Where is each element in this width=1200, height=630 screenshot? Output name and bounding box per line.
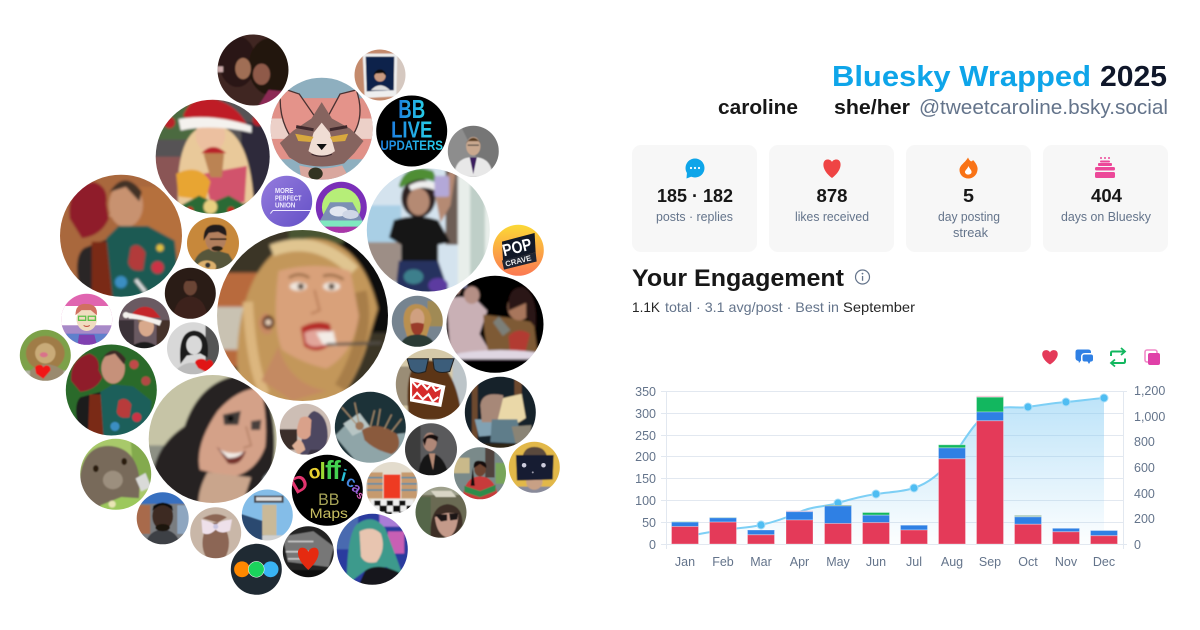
avatar: teal-haired woman bbox=[336, 514, 408, 585]
icon: chat bubble bbox=[686, 158, 704, 178]
month labels: May bbox=[826, 555, 851, 569]
avatar: smiling woman with dark hair bbox=[148, 375, 277, 503]
engagement summary bbox=[632, 299, 915, 315]
avatar: polaroid in hand bbox=[354, 50, 406, 100]
avatar: bug in bed painting bbox=[334, 392, 406, 463]
avatar: black and white street with red heart bbox=[282, 526, 334, 578]
left axis labels: 50 bbox=[642, 516, 656, 530]
cumulative area bbox=[685, 398, 1104, 544]
cumulative line bbox=[685, 398, 1104, 537]
month labels: Jun bbox=[866, 555, 886, 569]
heading: Your Engagement: Your Engagement bbox=[632, 265, 844, 292]
avatar: woman in sunglasses bbox=[416, 486, 466, 538]
avatar: woman in black suit bbox=[405, 423, 457, 476]
avatar: Pop Crave bbox=[492, 224, 544, 276]
avatar: man with glasses bbox=[187, 217, 239, 270]
avatar: man with red beard bbox=[392, 296, 443, 347]
month labels: Aug bbox=[941, 555, 963, 569]
title: Bluesky Wrapped 2025 bbox=[832, 61, 1167, 93]
avatar: three dots logo bbox=[230, 544, 282, 595]
month labels: Nov bbox=[1055, 555, 1078, 569]
avatar: Pop Crave: POP bbox=[500, 235, 534, 260]
icon: flame bbox=[960, 158, 978, 178]
right axis labels: 400 bbox=[1134, 487, 1155, 501]
month labels: Jan bbox=[675, 555, 695, 569]
right axis labels: 800 bbox=[1134, 435, 1155, 449]
avatar: Dolffica's BB Maps: i bbox=[339, 466, 349, 485]
stat value: 185 · 182 bbox=[657, 185, 733, 206]
avatar: Dolffica's BB Maps bbox=[292, 454, 363, 526]
stat card: posts and replies bbox=[632, 145, 757, 252]
icon: replies bbox=[1076, 350, 1093, 364]
avatar: Pop Crave: CRAVE bbox=[504, 253, 532, 269]
avatar: BB Live Updaters: BB bbox=[398, 96, 425, 124]
month labels: Sep bbox=[979, 555, 1001, 569]
avatar: More Perfect Union bbox=[261, 176, 312, 227]
month labels: Apr bbox=[790, 555, 809, 569]
stat value: 878 bbox=[816, 185, 848, 206]
summary: best month: September bbox=[843, 299, 915, 315]
avatar: More Perfect Union: PERFECT bbox=[275, 195, 302, 202]
avatar: large blonde woman eating cake bbox=[217, 230, 388, 401]
month labels: Mar bbox=[750, 555, 772, 569]
avatar: santa hat with chihuahua bbox=[156, 100, 270, 214]
month labels: Feb bbox=[712, 555, 734, 569]
summary: details: total · 3.1 avg/post · Best in bbox=[665, 299, 839, 315]
avatar: man in white suit bbox=[448, 126, 499, 177]
pronouns: she/her bbox=[834, 97, 910, 119]
icon: likes bbox=[1042, 350, 1058, 364]
title word: Bluesky Wrapped: Bluesky Wrapped bbox=[832, 61, 1091, 93]
avatar: Dolffica's BB Maps: a bbox=[348, 480, 364, 497]
avatar: Dolffica's BB Maps: D bbox=[286, 468, 313, 499]
avatar: Domo with sunglasses bbox=[396, 348, 467, 420]
cumulative points bbox=[757, 394, 1108, 529]
avatar: black and white woman bbox=[167, 322, 219, 374]
avatar: dog in lion costume bbox=[20, 330, 71, 381]
left axis labels: 300 bbox=[635, 407, 656, 421]
right axis labels: 200 bbox=[1134, 512, 1155, 526]
stat card: streak bbox=[906, 145, 1031, 252]
icon: quotes bbox=[1145, 350, 1160, 365]
avatar: More Perfect Union: MORE bbox=[275, 188, 294, 195]
left axis labels: 100 bbox=[635, 494, 656, 508]
avatar: anime couple hugging bbox=[464, 376, 536, 448]
avatar: red door library bbox=[366, 462, 418, 514]
icon: reposts bbox=[1111, 348, 1125, 366]
avatar: cloud on purple ring bbox=[316, 182, 367, 233]
handle: @tweetcaroline.bsky.social bbox=[919, 97, 1168, 119]
avatar: hair bow bbox=[190, 507, 242, 558]
title word: 2025: 2025 bbox=[1100, 61, 1167, 93]
stacked bars bbox=[672, 396, 1118, 544]
icon: info bbox=[856, 270, 870, 284]
stat label: day posting bbox=[938, 210, 1000, 224]
right axis labels: 1,000 bbox=[1134, 410, 1165, 424]
chart legend icons bbox=[1042, 348, 1160, 366]
avatar: Dolffica's BB Maps: BB bbox=[318, 490, 339, 509]
avatar: BB Live Updaters: LIVE bbox=[391, 116, 432, 142]
avatar: woman in colourful sweater bbox=[454, 447, 506, 500]
left axis labels: 350 bbox=[635, 385, 656, 399]
avatar: couple kissing, wooden wall bbox=[60, 174, 182, 297]
avatar: cat on trans flag bbox=[270, 78, 373, 180]
stat label line 2: streak bbox=[953, 226, 989, 240]
chart: monthly engagement bbox=[635, 384, 1165, 569]
panel: avatar bubble cluster bbox=[15, 27, 565, 600]
avatar: people on black background bbox=[446, 276, 544, 373]
avatar: mirror selfie with green hat bbox=[366, 168, 490, 292]
display name: caroline bbox=[718, 97, 798, 119]
icon: birthday cake bbox=[1095, 157, 1115, 178]
avatar: cartoon with green glasses bbox=[61, 294, 112, 345]
right axis labels: 600 bbox=[1134, 461, 1155, 475]
avatar: man in dark room bbox=[164, 268, 216, 319]
avatar: man with box over face bbox=[508, 442, 560, 493]
right axis labels: 1,200 bbox=[1134, 384, 1165, 398]
right axis labels: 0 bbox=[1134, 538, 1141, 552]
stat label: days on Bluesky bbox=[1061, 210, 1152, 224]
left axis labels: 250 bbox=[635, 429, 656, 443]
stat value: 404 bbox=[1091, 185, 1123, 206]
left axis labels bbox=[635, 385, 656, 552]
month labels bbox=[675, 555, 1115, 569]
avatar: couple, green christmas background bbox=[66, 344, 157, 436]
avatar: building and blue sky bbox=[242, 490, 293, 540]
avatar: two women bbox=[218, 34, 288, 106]
avatar: Dolffica's BB Maps: s bbox=[353, 489, 366, 502]
summary: total: 1.1K bbox=[632, 299, 661, 315]
avatar: man outdoors bbox=[136, 492, 189, 544]
profile line bbox=[718, 97, 1168, 119]
stat label: likes received bbox=[795, 210, 869, 224]
stat card: likes bbox=[769, 145, 894, 252]
avatar: Dolffica's BB Maps: l bbox=[319, 458, 326, 484]
left axis labels: 0 bbox=[649, 538, 656, 552]
icon: heart bbox=[823, 159, 841, 178]
avatar: More Perfect Union: UNION bbox=[275, 202, 295, 209]
month labels: Oct bbox=[1018, 555, 1038, 569]
avatar: woman with grey hair bbox=[280, 404, 331, 455]
avatar: Dolffica's BB Maps: c bbox=[343, 473, 359, 492]
left axis labels: 200 bbox=[635, 450, 656, 464]
avatar: Dolffica's BB Maps: Maps bbox=[310, 506, 348, 521]
grid lines bbox=[661, 391, 1127, 549]
avatar: Dolffica's BB Maps: ff bbox=[325, 457, 341, 485]
avatar: BB Live Updaters: UPDATERS bbox=[380, 138, 443, 154]
month labels: Jul bbox=[906, 555, 922, 569]
month labels: Dec bbox=[1093, 555, 1115, 569]
stat card: days on Bluesky bbox=[1043, 145, 1168, 252]
left axis labels: 150 bbox=[635, 472, 656, 486]
avatar: Dolffica's BB Maps: o bbox=[306, 461, 323, 484]
right axis labels bbox=[1134, 384, 1165, 552]
avatar: BB Live Updaters bbox=[376, 96, 448, 166]
stat value: 5 bbox=[963, 185, 974, 206]
avatar: wombat illustration bbox=[80, 438, 152, 510]
stat label: posts · replies bbox=[656, 210, 733, 224]
avatar: woman in santa hat bbox=[118, 297, 170, 348]
